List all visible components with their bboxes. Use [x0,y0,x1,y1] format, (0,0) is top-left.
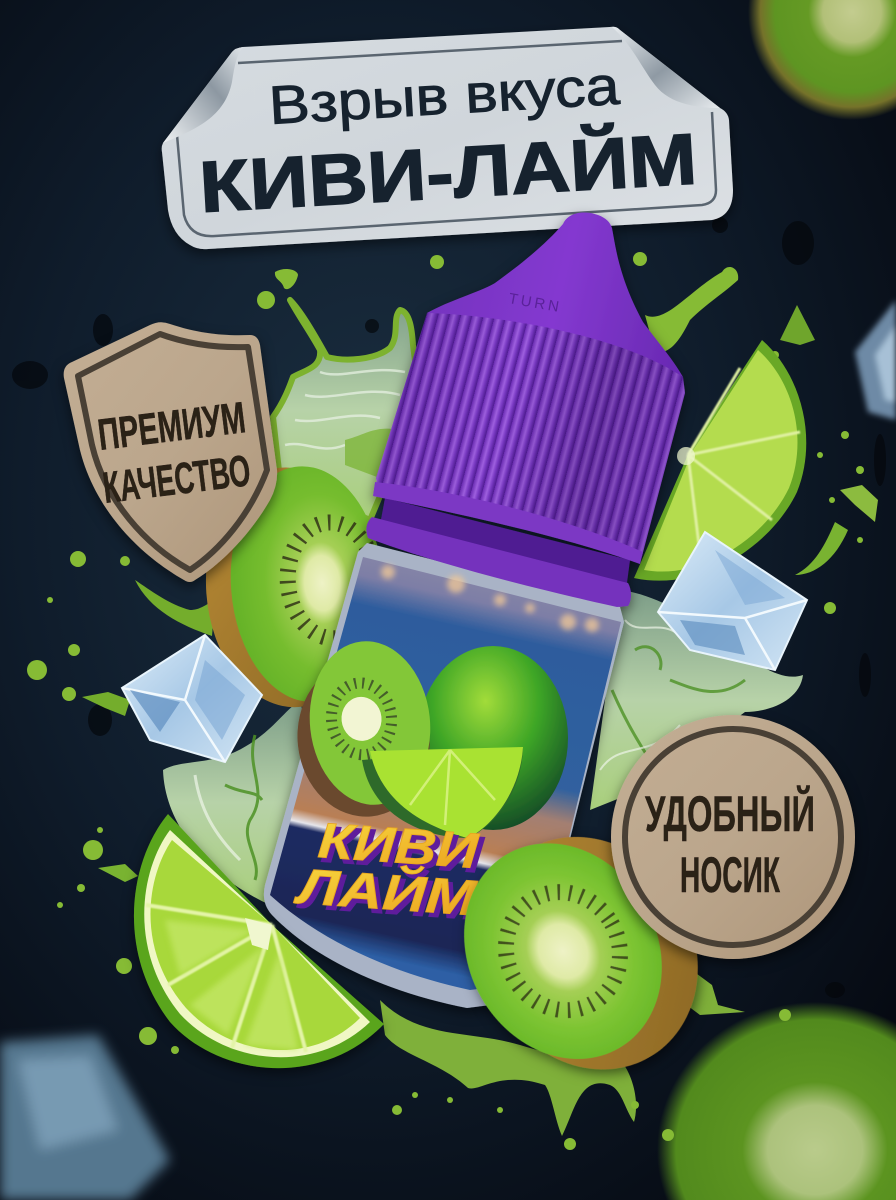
banner inner border [177,41,716,236]
label name: ЛАЙМ [297,861,483,931]
shield badge [64,322,277,582]
bottle glass [264,543,624,1008]
blurred ice bottom left [0,1035,170,1200]
right ice cube [658,532,807,670]
bottle [264,212,685,1008]
blurred kiwi top right [740,0,896,125]
left ice cube [122,635,262,762]
label art: lime wedge [362,747,523,838]
splash: left drip [82,692,130,716]
splash: left arm [135,580,215,636]
top right lime wedge [634,340,806,581]
peeled corners [163,47,243,143]
label name [293,812,485,931]
splash: right arms [795,522,848,575]
badge text [95,393,253,513]
bottom right kiwi [426,791,740,1115]
title banner: КИВИ-ЛАЙМ [197,117,699,228]
blurred kiwi bottom right [650,995,896,1200]
dark water drops [12,217,886,998]
badge text: НОСИК [680,847,780,903]
cap embossed text: TURN [507,290,563,316]
label name: ЛАЙМ [293,857,479,927]
splash: right of bottom kiwi [680,965,745,1015]
label name: КИВИ [316,812,481,879]
splash: upper left [273,300,420,520]
title banner [162,27,733,249]
splash: right of bottle [590,590,803,810]
label art: kiwi [288,635,439,823]
blurred ice right [855,300,896,420]
banner heading: Взрыв вкуса [267,56,622,136]
left kiwi [198,461,391,713]
cap skirt lip [373,482,643,564]
cap collar [366,498,631,607]
cap ribbed skirt [376,309,685,556]
splash: upper right arm [645,267,738,352]
splash: bottom [380,1000,636,1136]
juice splash [82,267,878,1136]
badge text [645,785,815,903]
cap nozzle [427,212,683,377]
splash: lower left [163,700,320,905]
label art: lime [418,646,568,830]
label name: КИВИ [320,816,485,883]
round badge [611,715,855,959]
badge text: ПРЕМИУМ [95,393,248,460]
droplets [27,237,864,1150]
bottom left lime wedge [134,814,384,1068]
badge text: КАЧЕСТВО [100,446,253,513]
bottle label [270,557,621,990]
